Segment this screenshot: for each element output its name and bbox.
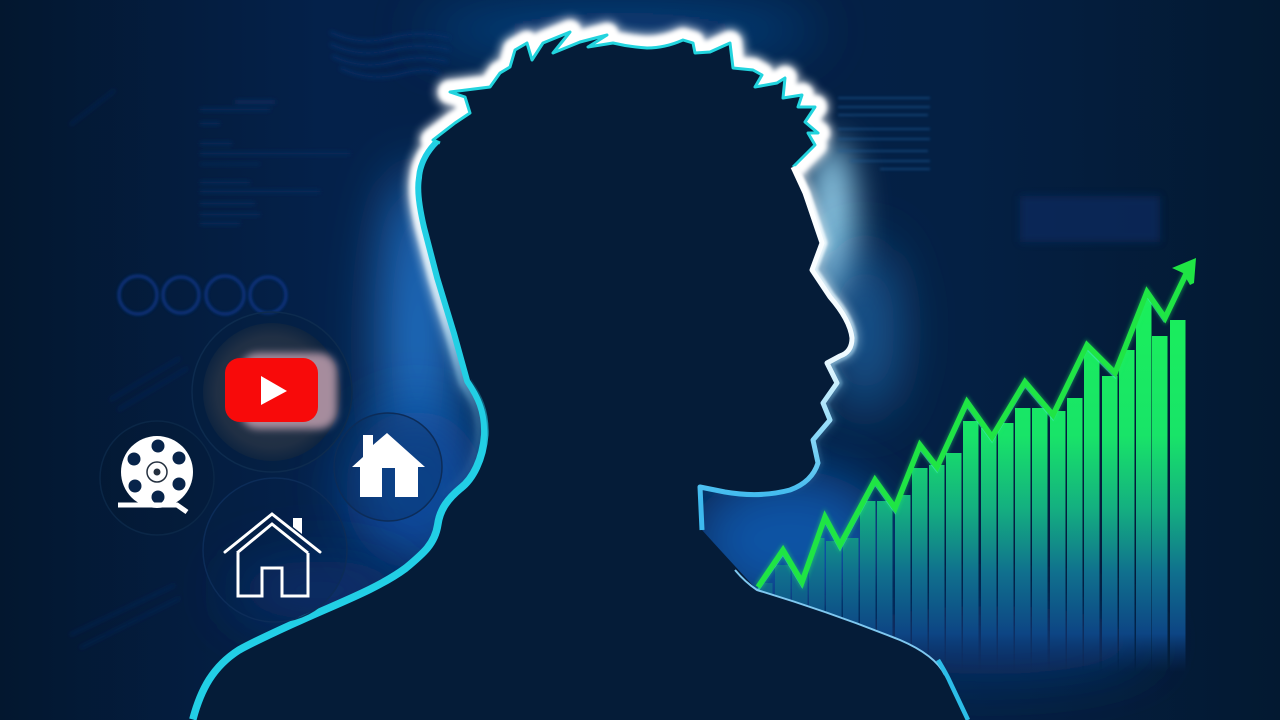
shoulder right cyan: [938, 660, 968, 720]
shoulder thin line: [735, 570, 945, 675]
faint background HUD graphics: [70, 32, 1160, 648]
faint dial circles: [119, 276, 286, 314]
cyan lower body edge: [195, 380, 487, 720]
icon: YouTube play button: [192, 312, 352, 472]
faint wave lines: [330, 32, 450, 77]
cyan hair edge: [433, 32, 818, 167]
faint diagonal strokes: [70, 90, 188, 648]
faint data lines left: [200, 100, 350, 225]
icon: solid house: [334, 413, 442, 521]
green rising trend arrow: [758, 258, 1196, 590]
faint data lines right: [838, 97, 930, 170]
icon: film reel: [100, 421, 214, 535]
outer white glow: back and hair: [195, 32, 818, 720]
face outline: [700, 167, 852, 530]
outer white glow: face: [700, 167, 852, 530]
silhouette fill: [195, 32, 968, 720]
green bar chart: [757, 296, 1186, 690]
faint panel top right: [1020, 196, 1160, 242]
icon group: [100, 312, 442, 622]
background glows behind the head: [230, 8, 1150, 674]
person silhouette with glowing outline: [195, 32, 968, 720]
cyan band on back of head: [195, 143, 487, 720]
icon: outlined house: [203, 478, 347, 622]
